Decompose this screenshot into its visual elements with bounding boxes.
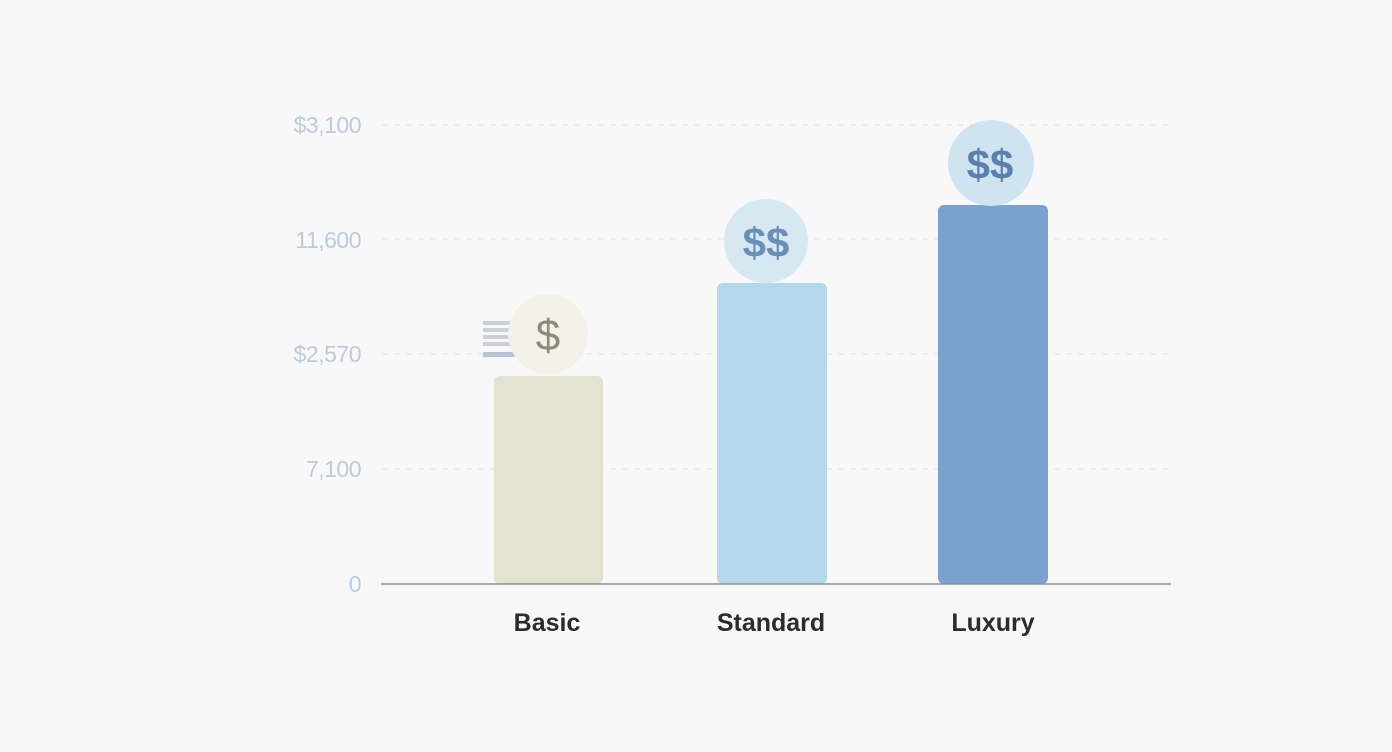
y-axis labels: 0 bbox=[349, 571, 361, 597]
bar: Basic bbox=[494, 376, 603, 584]
icon: luxury coin bbox=[948, 120, 1034, 206]
icon: basic coin with stack bbox=[483, 294, 588, 374]
icon: basic coin with stack: $ bbox=[536, 311, 560, 360]
x-axis labels: Standard bbox=[717, 609, 825, 637]
x-axis labels bbox=[514, 609, 1035, 637]
y-axis labels: 7,100 bbox=[306, 456, 361, 482]
y-axis labels bbox=[294, 112, 361, 597]
icon: standard coin bbox=[724, 199, 808, 283]
x-axis labels: Luxury bbox=[951, 609, 1035, 637]
bar: Luxury bbox=[938, 205, 1048, 584]
icon: luxury coin: $$ bbox=[967, 141, 1013, 188]
bar: Standard bbox=[717, 283, 827, 584]
y-axis labels: 11,600 bbox=[295, 227, 361, 253]
y-axis labels: $2,570 bbox=[294, 341, 361, 367]
y-axis labels: $3,100 bbox=[294, 112, 361, 138]
x-axis labels: Basic bbox=[514, 609, 580, 637]
icon: standard coin: $$ bbox=[743, 219, 789, 266]
